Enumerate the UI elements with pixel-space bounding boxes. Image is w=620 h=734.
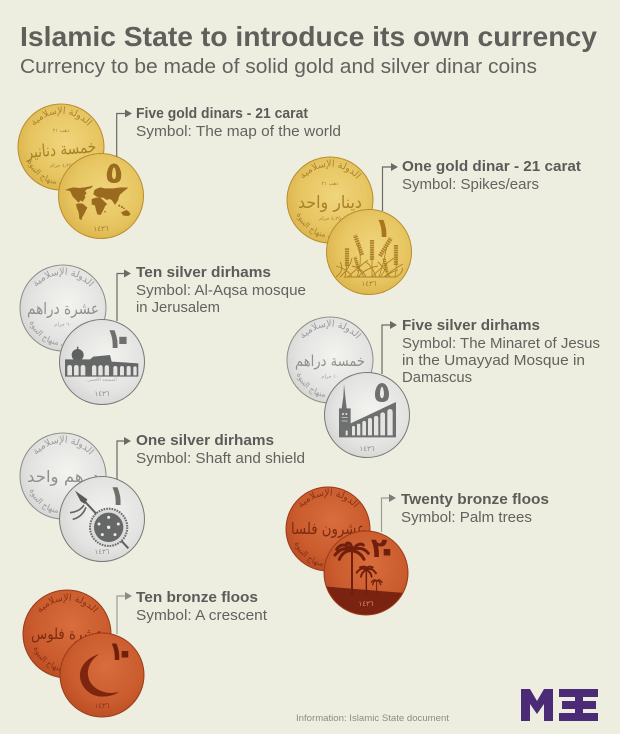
label: ten silver dirhams bbox=[136, 265, 306, 316]
panel: five silver dirhams bbox=[286, 316, 600, 458]
coin front: wheat ears bbox=[326, 210, 412, 294]
label: one silver dirhams: Symbol: Shaft and shield bbox=[136, 451, 305, 467]
coin back: one dirham inscription: درهم واحد bbox=[27, 467, 99, 487]
coin back: five dinars inscription bbox=[18, 104, 104, 190]
coin front: crescent bbox=[60, 630, 144, 717]
coin back: ten dirhams inscription: على منهاج النبوة bbox=[30, 321, 62, 346]
coin back: five dinars inscription: ذهب ٢١ bbox=[53, 128, 69, 134]
icon: crescent bbox=[80, 654, 119, 697]
coin back: five dirhams inscription: على منهاج النبوة bbox=[296, 373, 328, 397]
coin back: twenty floos inscription bbox=[286, 486, 370, 572]
label: five silver dirhams bbox=[402, 318, 600, 386]
connector arrow bbox=[117, 592, 132, 634]
connector arrow bbox=[382, 163, 398, 211]
coin front: Al-Aqsa mosque: ٠ bbox=[110, 313, 136, 362]
label: five silver dirhams: Damascus bbox=[402, 370, 472, 386]
label: five silver dirhams: Symbol: The Minaret of Jesus bbox=[402, 336, 600, 352]
label: one gold dinar: One gold dinar - 21 carat bbox=[402, 159, 581, 175]
coin front: Minaret of Jesus: ٥ bbox=[373, 375, 391, 409]
coin back: ten floos inscription bbox=[22, 590, 112, 678]
panel: twenty bronze floos bbox=[286, 486, 549, 616]
coin back: one dinar inscription bbox=[286, 156, 374, 244]
label: ten bronze floos bbox=[136, 590, 267, 624]
coin front: Al-Aqsa mosque: ١ bbox=[105, 322, 123, 355]
coin front: shaft and shield bbox=[60, 476, 144, 562]
panel: one gold dinar bbox=[286, 156, 581, 295]
coin front: Al-Aqsa mosque bbox=[60, 313, 144, 404]
coin front: palm trees bbox=[324, 530, 408, 616]
panel: five gold dinars bbox=[18, 104, 341, 239]
coin front: shaft and shield: ١٤٣٦ bbox=[94, 548, 110, 556]
coin back: five dinars inscription: الدولة الإسلامية bbox=[32, 106, 92, 126]
label: twenty bronze floos: Twenty bronze floos bbox=[401, 492, 549, 508]
coin back: five dirhams inscription: الدولة الإسلامية bbox=[300, 319, 362, 338]
coin back: ten floos inscription: عشرة فلوس bbox=[31, 625, 103, 643]
label: one silver dirhams bbox=[136, 433, 305, 467]
coin back: twenty floos inscription: الدولة الإسلامية bbox=[298, 488, 360, 508]
panel: ten bronze floos bbox=[22, 590, 267, 718]
label: one gold dinar bbox=[402, 159, 581, 193]
label: ten bronze floos: Symbol: A crescent bbox=[136, 608, 267, 624]
coin back: five dirhams inscription: خمسة دراهم bbox=[295, 352, 365, 370]
coin back: twenty floos inscription: عشرون فلسا bbox=[291, 519, 365, 539]
label: five gold dinars: Symbol: The map of the world bbox=[136, 124, 341, 140]
coin back: one dinar inscription: ٤٫٢٥ جرام bbox=[319, 216, 341, 222]
coin back: five dirhams inscription: ١٠ جرام bbox=[321, 374, 339, 380]
coin back: five dinars inscription: خمسة دنانير bbox=[25, 137, 97, 163]
coin front: wheat ears: ١ bbox=[375, 213, 391, 244]
coin front: crescent: ١٤٣٦ bbox=[94, 702, 110, 710]
coin back: ten dirhams inscription bbox=[20, 264, 106, 352]
coin back: one dirham inscription bbox=[20, 432, 106, 520]
label: ten silver dirhams: Symbol: Al-Aqsa mosque bbox=[136, 283, 306, 299]
label: twenty bronze floos: Symbol: Palm trees bbox=[401, 510, 532, 526]
connector arrow bbox=[382, 494, 396, 532]
coin back: five dirhams inscription bbox=[286, 316, 374, 404]
coin front: Minaret of Jesus bbox=[324, 372, 410, 458]
icon: minaret and colonnade bbox=[339, 384, 396, 437]
coin back: ten dirhams inscription: ٦٠ جرام bbox=[54, 322, 72, 328]
panel: ten silver dirhams bbox=[20, 264, 306, 405]
label: ten silver dirhams: Ten silver dirhams bbox=[136, 265, 271, 281]
icon: spear and shield bbox=[70, 491, 128, 548]
label: ten bronze floos: Ten bronze floos bbox=[136, 590, 258, 606]
coin back: one dirham inscription: على منهاج النبوة bbox=[30, 489, 58, 513]
connector arrow bbox=[382, 321, 397, 374]
coin back: one dinar inscription: الدولة الإسلامية bbox=[300, 159, 362, 178]
coin back: ten dirhams inscription: عشرة دراهم bbox=[27, 299, 99, 319]
coin back: one dirham inscription: الدولة الإسلامية bbox=[34, 435, 94, 454]
icon: wheat bbox=[336, 235, 403, 277]
coin front: crescent: ١ bbox=[108, 637, 124, 667]
coin front: Al-Aqsa mosque: ١٤٣٦ bbox=[94, 390, 110, 398]
label: five silver dirhams: Five silver dirhams bbox=[402, 318, 540, 334]
coin back: five dinars inscription: ٤٫٢٥ جرام bbox=[50, 163, 72, 169]
coin front: shaft and shield: ١ bbox=[108, 479, 126, 512]
connector arrow bbox=[117, 270, 131, 321]
label: one silver dirhams: One silver dirhams bbox=[136, 433, 274, 449]
source note: Information: Islamic State document bbox=[296, 712, 449, 723]
coin back: ten dirhams inscription: الدولة الإسلامية bbox=[34, 267, 94, 286]
coin back: twenty floos inscription: على منهاج النبوة bbox=[294, 542, 323, 566]
label: five gold dinars: Five gold dinars - 21 carat bbox=[136, 106, 308, 122]
title: Islamic State to introduce its own currency bbox=[20, 21, 598, 52]
coin back: five dinars inscription: على منهاج النبوة bbox=[28, 160, 60, 184]
icon: mosque bbox=[65, 347, 138, 377]
coin back: ten floos inscription: على منهاج النبوة bbox=[34, 647, 60, 671]
coin front: world map: ١٤٣٦ bbox=[93, 225, 109, 233]
coin front: world map bbox=[58, 154, 144, 238]
coin front: Minaret of Jesus: ١٤٣٦ bbox=[359, 445, 375, 453]
icon: world map bbox=[65, 186, 131, 220]
coin front: crescent: ٠ bbox=[113, 630, 137, 674]
coin back: ten floos inscription: الدولة الإسلامية bbox=[38, 593, 98, 612]
icon: ground and palm trees: ١٤٣٦ bbox=[358, 600, 374, 608]
coin back: one dinar inscription: دينار واحد bbox=[298, 193, 362, 213]
coin front: Al-Aqsa mosque: المسجد الأقصى bbox=[87, 376, 117, 383]
label: five silver dirhams: in the Umayyad Mosque in bbox=[402, 353, 585, 369]
coin front: palm trees: ٢ bbox=[371, 533, 388, 564]
label: five gold dinars bbox=[136, 106, 341, 140]
subtitle: Currency to be made of solid gold and silver dinar coins bbox=[20, 55, 537, 78]
coin front: wheat ears: ١٤٣٦ bbox=[361, 280, 377, 288]
panel: one silver dirham bbox=[20, 432, 305, 562]
connector arrow bbox=[117, 437, 131, 479]
coin back: one dinar inscription: على منهاج النبوة bbox=[296, 213, 329, 238]
logo: MEE bbox=[521, 689, 598, 721]
connector arrow bbox=[117, 110, 132, 157]
label: one gold dinar: Symbol: Spikes/ears bbox=[402, 177, 539, 193]
label: ten silver dirhams: in Jerusalem bbox=[136, 300, 220, 316]
coin front: palm trees: ٠ bbox=[375, 528, 399, 572]
label: twenty bronze floos bbox=[401, 492, 549, 526]
coin back: one dinar inscription: ذهب ٢١ bbox=[322, 181, 338, 187]
coin front: world map: ٥ bbox=[105, 156, 123, 191]
